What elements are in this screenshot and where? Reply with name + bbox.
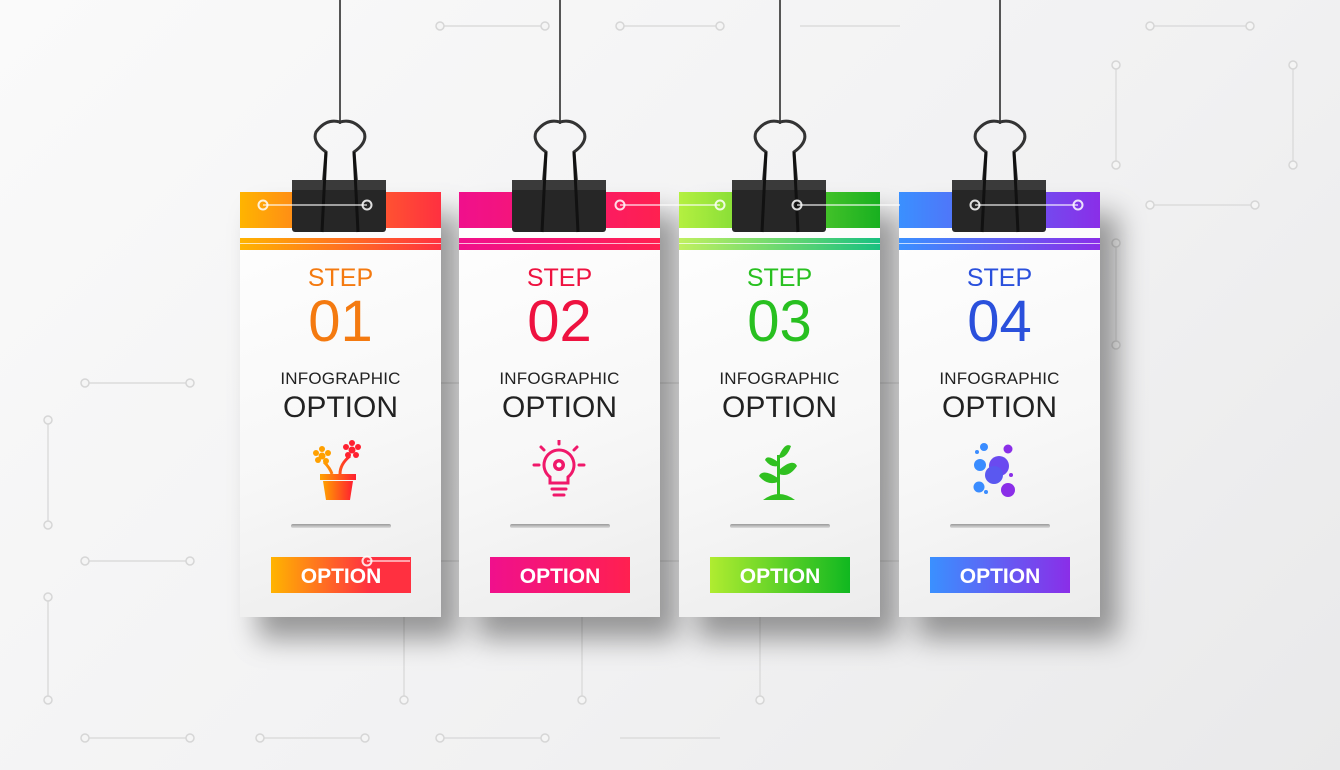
clip 3 (732, 0, 826, 232)
card 2 button (490, 557, 630, 593)
card 3 top band (679, 192, 880, 228)
card 4 number: 04 (967, 289, 1032, 354)
card 1 number: 01 (308, 289, 373, 354)
card 4 top band (899, 192, 1100, 228)
card 3 heading: INFOGRAPHIC (719, 369, 840, 388)
card 3 button: OPTION (740, 565, 820, 588)
card 1: OPTION (283, 391, 398, 424)
icon: light bulb (532, 440, 586, 496)
card 1 (240, 192, 441, 617)
card 2: OPTION (502, 391, 617, 424)
card 3 number: 03 (747, 289, 812, 354)
card 3 button (710, 557, 850, 593)
icon: flower pot (313, 440, 361, 500)
card 2 (459, 192, 660, 617)
card 2 step label: STEP (527, 264, 592, 292)
card 4 (899, 192, 1100, 617)
card 1 button (271, 557, 411, 593)
clip 1 (292, 0, 386, 232)
card 4 heading: INFOGRAPHIC (939, 369, 1060, 388)
card 1 heading: INFOGRAPHIC (280, 369, 401, 388)
card 2 top band (459, 192, 660, 228)
card 2 number: 02 (527, 289, 592, 354)
clip 4 (952, 0, 1046, 232)
card 4: OPTION (942, 391, 1057, 424)
card 4 button (930, 557, 1070, 593)
card 3 (679, 192, 880, 617)
card 1 step label: STEP (308, 264, 373, 292)
clip 2 (512, 0, 606, 232)
card 2 heading: INFOGRAPHIC (499, 369, 620, 388)
card 1 button: OPTION (301, 565, 381, 588)
icon: sprout (759, 445, 797, 500)
card 1 top band (240, 192, 441, 228)
card 4 button: OPTION (960, 565, 1040, 588)
card 2 button: OPTION (520, 565, 600, 588)
icon: bubbles (974, 443, 1015, 497)
card 4 step label: STEP (967, 264, 1032, 292)
card 3 step label: STEP (747, 264, 812, 292)
card 3: OPTION (722, 391, 837, 424)
